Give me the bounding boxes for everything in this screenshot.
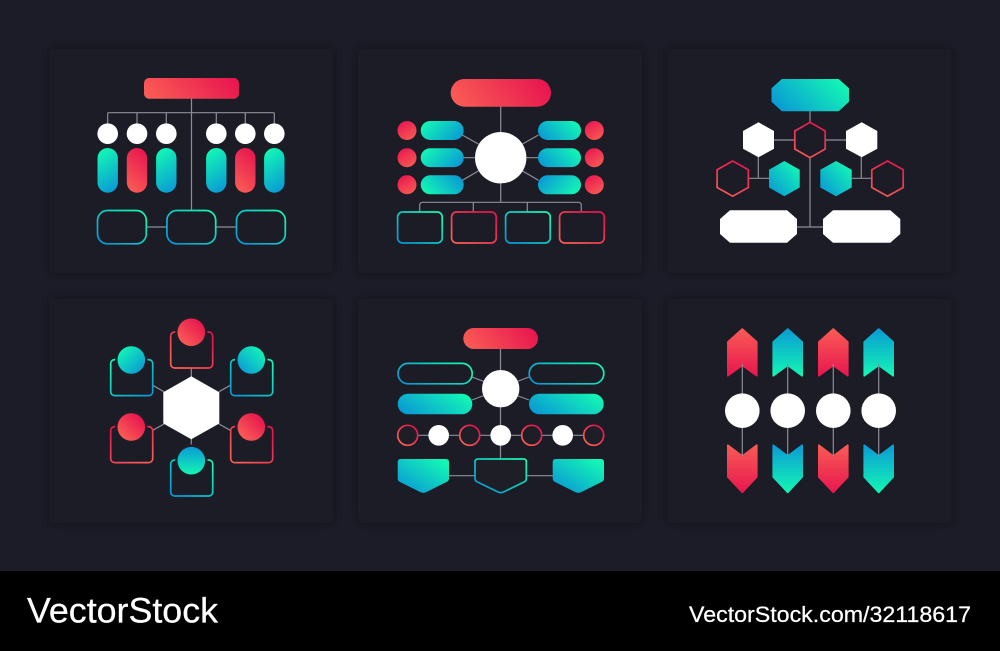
white hexagons [743, 122, 877, 157]
outlined boxes [398, 212, 604, 243]
panel: hub with pills and circles [358, 49, 642, 273]
outlined pills [398, 363, 604, 384]
central hexagon [163, 376, 219, 439]
panel: hexagon tree [668, 49, 952, 273]
hub circle [475, 132, 526, 183]
filled shields [398, 459, 604, 493]
filled pills [398, 394, 604, 414]
outlined hexagons side [717, 161, 903, 196]
panel: hub with row of circles and shields [358, 299, 642, 523]
down arrows [728, 445, 893, 492]
row of white circles [428, 425, 573, 446]
left pills [421, 121, 464, 194]
panel: hexagon hub with cards [49, 299, 333, 523]
outlined hexagon centre [795, 122, 825, 158]
white circles [97, 123, 285, 144]
right pills [538, 121, 581, 194]
up arrows [728, 329, 893, 376]
red circles [398, 121, 604, 194]
heading pill [451, 79, 551, 107]
footer bar [0, 571, 1000, 651]
footer logo text: VectorStock [27, 591, 219, 630]
white octagons [720, 210, 900, 243]
heading bar [144, 78, 239, 99]
heading pill [463, 328, 538, 349]
panel: arrows and circles [668, 299, 952, 523]
footer image id text: VectorStock.com/32118617 [689, 602, 971, 627]
white circles [725, 393, 896, 428]
panel: org chart with pills [49, 49, 333, 273]
row of outlined circles [398, 425, 604, 445]
hub circle [482, 370, 519, 407]
knockout rings [115, 316, 268, 477]
outlined shield [475, 459, 526, 493]
outlined boxes [98, 210, 285, 244]
cards [111, 332, 273, 496]
gradient hexagons [769, 161, 852, 196]
connectors [742, 364, 879, 456]
vertical pills [98, 148, 284, 193]
top octagon [772, 80, 848, 111]
card circles [118, 318, 265, 475]
